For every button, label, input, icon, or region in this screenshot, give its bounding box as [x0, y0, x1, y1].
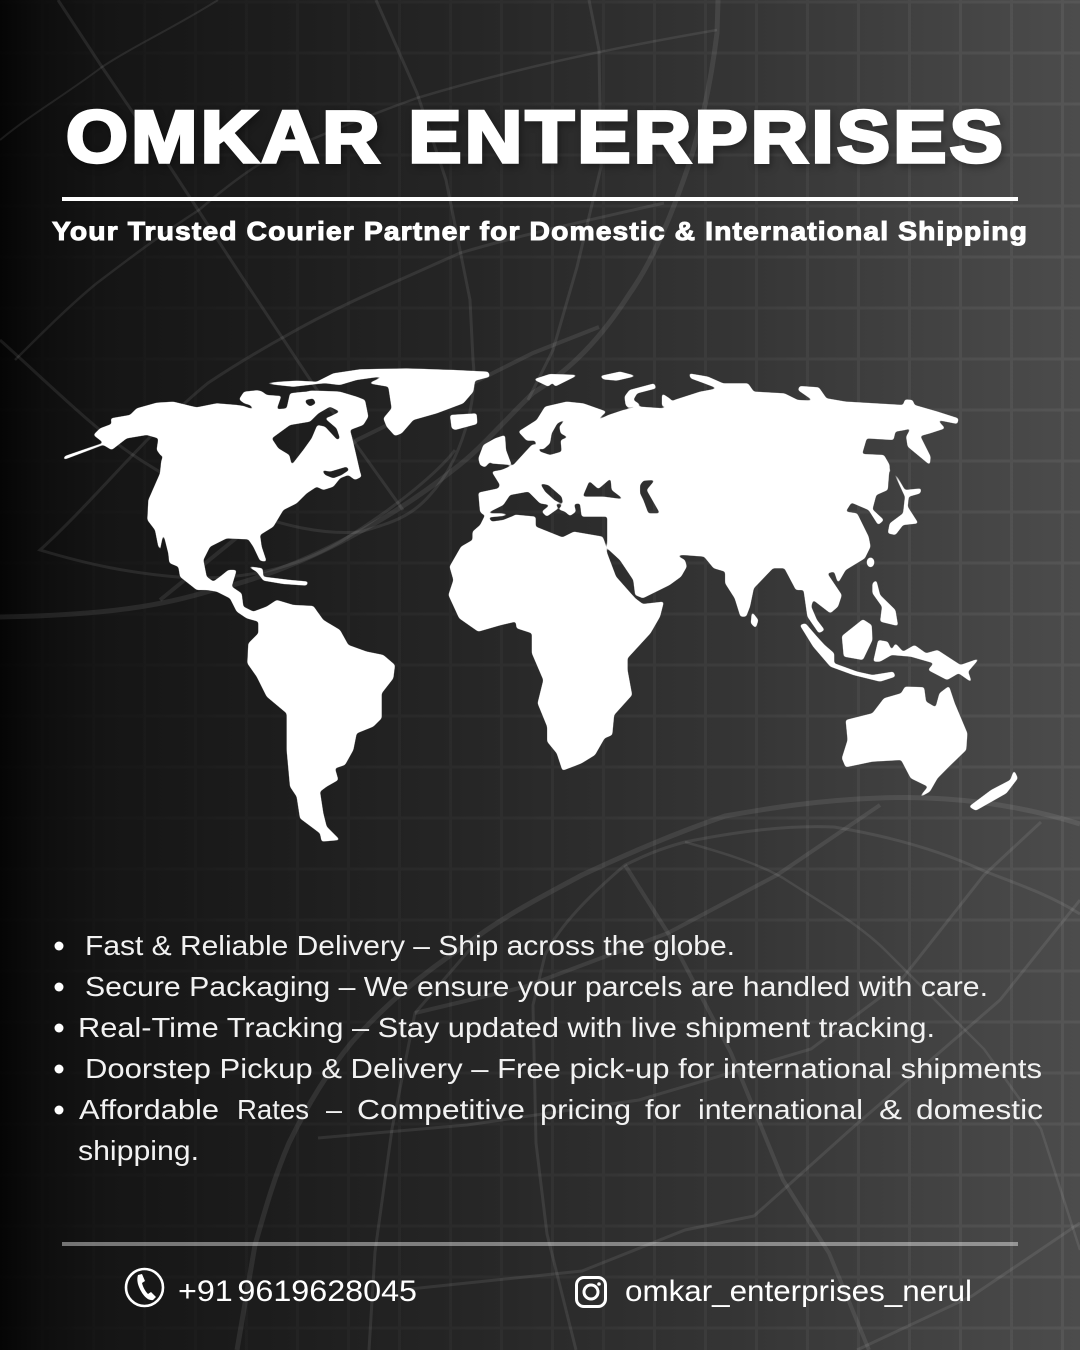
bullet: secure packaging: Secure Packaging – We ensure your parcels are handled with care.: [85, 971, 988, 1002]
island: Cuba: [247, 566, 308, 586]
bullet: real-time tracking: Real-Time Tracking – Stay updated with live shipment tracking.: [78, 1012, 935, 1043]
Africa: [448, 513, 664, 771]
continent: North and South America: [63, 368, 490, 842]
phone contact: +91 9619628045: [178, 1275, 417, 1308]
bullet: fast and reliable delivery: Fast & Reliable Delivery – Ship across the globe.: [85, 930, 735, 961]
New Zealand: [969, 770, 1018, 811]
bullet: affordable rates: pricing: [540, 1094, 631, 1125]
Indonesia: [800, 623, 895, 682]
bullet list of services: [54, 930, 1043, 1166]
bullet: affordable rates: for: [645, 1094, 681, 1125]
continents: Asia, Africa, Oceania: [448, 373, 1018, 811]
bullet: affordable rates: international: [698, 1094, 863, 1125]
Asia: [607, 373, 959, 633]
subtitle: Your Trusted Courier Partner for Domestic & International Shipping: [52, 216, 1028, 246]
phone contact: [126, 1269, 417, 1308]
bullet: affordable rates: domestic: [916, 1094, 1043, 1125]
island: Svalbard: [533, 374, 578, 387]
footer divider line: [62, 1242, 1018, 1246]
icon: phone: [126, 1269, 163, 1306]
island: Greenland: [262, 368, 490, 436]
world map: [63, 368, 1018, 842]
instagram contact: omkar_enterprises_nerul: [625, 1275, 972, 1308]
bullet: affordable rates: Competitive: [357, 1094, 525, 1125]
title divider line: [62, 197, 1018, 201]
Australia: [842, 686, 967, 798]
island: Iceland: [450, 413, 477, 430]
icon: instagram: [576, 1278, 606, 1306]
bullet: affordable rates: [54, 1094, 1043, 1166]
continent: Europe: [478, 372, 640, 518]
bullet: doorstep pickup: Doorstep Pickup & Delivery – Free pick-up for international shipments: [85, 1053, 1042, 1084]
Japan: [888, 467, 921, 535]
bullet: affordable rates: –: [326, 1094, 342, 1125]
bullet: affordable rates: Affordable: [79, 1094, 219, 1125]
bullet: affordable rates: Rates: [237, 1094, 309, 1125]
bullet: affordable rates: &: [879, 1094, 902, 1125]
bullet: affordable rates: shipping.: [78, 1135, 199, 1166]
island: Britain: [478, 435, 512, 467]
title: OMKAR ENTERPRISES: [66, 97, 1006, 178]
island: Franz Josef: [600, 372, 637, 381]
